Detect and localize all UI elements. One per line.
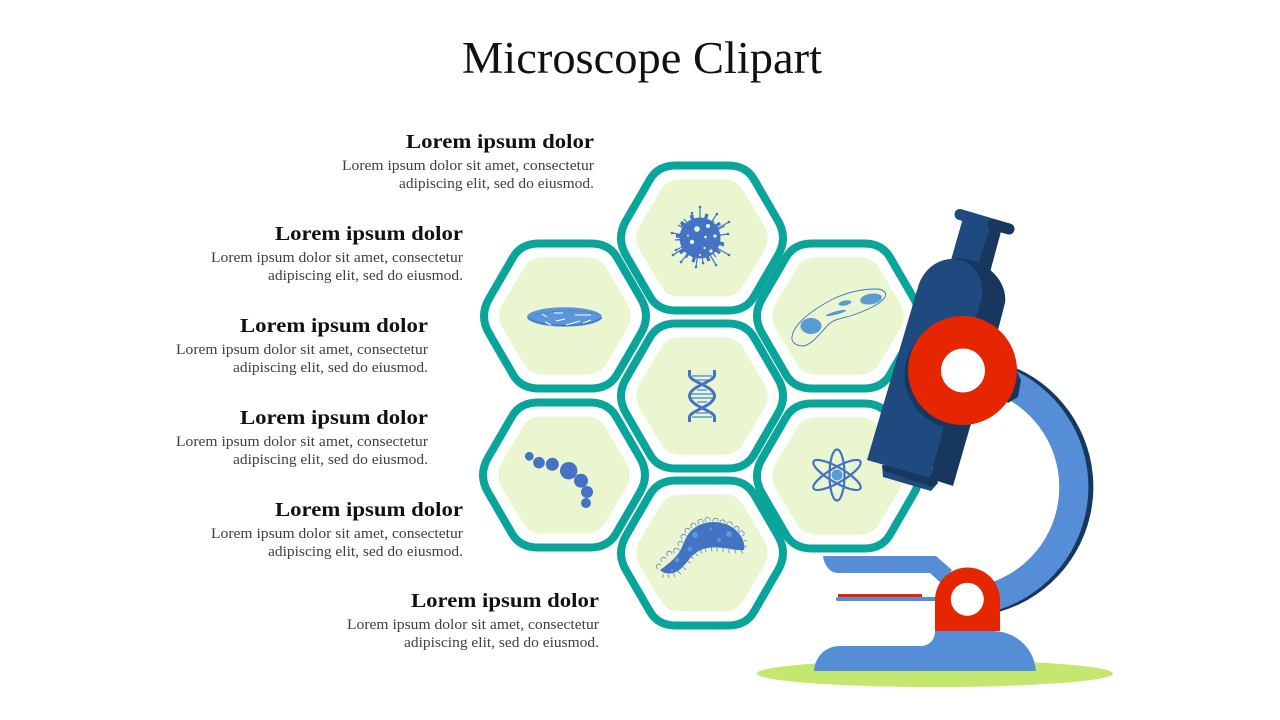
text block 3: adipiscing elit, sed do eiusmod.: [233, 360, 428, 376]
text block 1: Lorem ipsum dolor: [406, 131, 594, 153]
icon: virus: [672, 207, 729, 267]
pivot hole: [951, 583, 984, 616]
text block 5: [211, 499, 463, 560]
text block 1: adipiscing elit, sed do eiusmod.: [399, 176, 594, 192]
text block 6: Lorem ipsum dolor sit amet, consectetur: [347, 617, 599, 633]
text block 2: Lorem ipsum dolor sit amet, consectetur: [211, 250, 463, 266]
objective nose: [882, 465, 938, 491]
text block 5: Lorem ipsum dolor: [275, 499, 463, 521]
title: Microscope Clipart: [462, 33, 823, 83]
tube front: [867, 259, 982, 478]
curved arm: [990, 368, 1093, 612]
icon: bacterium: [656, 517, 747, 578]
text block 1: Lorem ipsum dolor sit amet, consectetur: [342, 158, 594, 174]
text block 4: Lorem ipsum dolor: [240, 407, 428, 429]
hexagon: virus: [621, 166, 783, 310]
base: [814, 631, 1036, 671]
text block 5: Lorem ipsum dolor sit amet, consectetur: [211, 526, 463, 542]
hexagon: cell chain: [483, 402, 645, 548]
knob hole: [941, 348, 985, 392]
knob shadow: [904, 340, 971, 428]
ground ellipse: [757, 660, 1113, 687]
hexagon: atom: [757, 404, 919, 548]
icon: petri dish: [527, 307, 602, 327]
text block 5: adipiscing elit, sed do eiusmod.: [268, 544, 463, 560]
icon: cell chain: [525, 452, 593, 508]
text block 4: [176, 407, 428, 468]
text block 6: adipiscing elit, sed do eiusmod.: [404, 635, 599, 651]
red pivot: [935, 568, 1000, 631]
microscope: [757, 214, 1113, 687]
eyepiece: [951, 214, 1009, 272]
text block 2: adipiscing elit, sed do eiusmod.: [268, 268, 463, 284]
hexagon: bacterium: [621, 480, 783, 626]
text block 4: adipiscing elit, sed do eiusmod.: [233, 452, 428, 468]
stage: [823, 556, 952, 601]
hexagon: paramecium: [757, 244, 919, 388]
text block 1: [342, 131, 594, 192]
icon: paramecium: [792, 289, 886, 346]
text block 6: [347, 590, 599, 651]
text block 6: Lorem ipsum dolor: [411, 590, 599, 612]
text block 3: [176, 315, 428, 376]
tube rear shade: [931, 258, 1005, 486]
hexagon: petri dish: [484, 244, 646, 388]
red focus knob: [908, 316, 1017, 425]
text block 3: Lorem ipsum dolor sit amet, consectetur: [176, 342, 428, 358]
text block 2: Lorem ipsum dolor: [275, 223, 463, 245]
text block 4: Lorem ipsum dolor sit amet, consectetur: [176, 434, 428, 450]
icon: DNA helix: [690, 370, 714, 422]
icon: atom: [810, 450, 864, 500]
text block 3: Lorem ipsum dolor: [240, 315, 428, 337]
hexagon: DNA: [621, 324, 783, 468]
text block 2: [211, 223, 463, 284]
